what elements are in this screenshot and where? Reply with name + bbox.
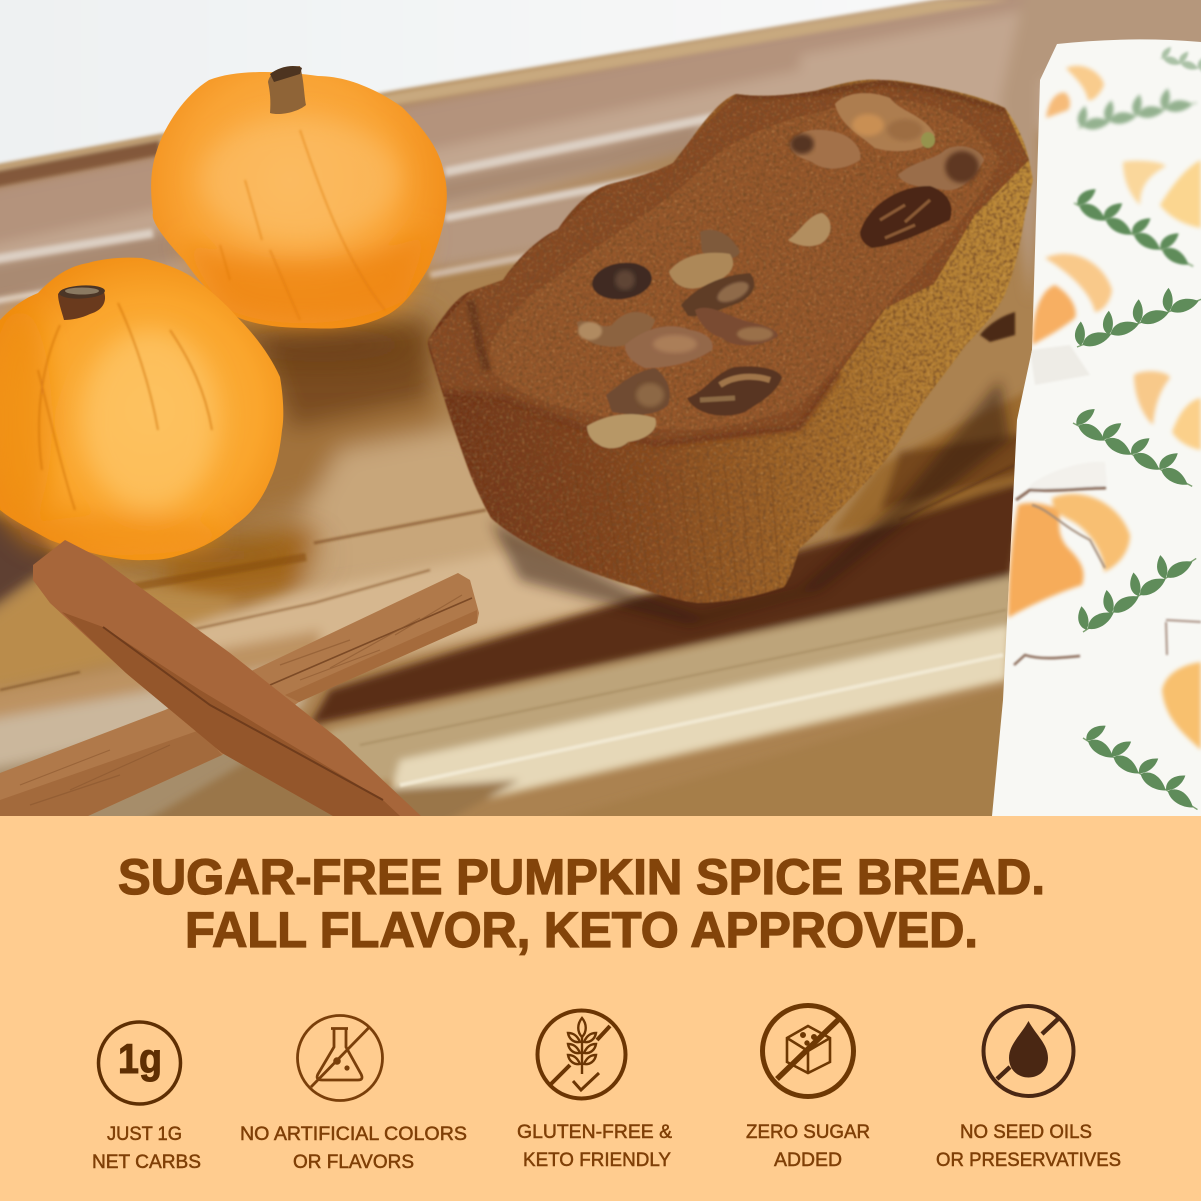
heading: SUGAR-FREE PUMPKIN SPICE BREAD. [118, 849, 1045, 905]
pumpkin shading [0, 310, 220, 555]
icon: 1g net carbs [98, 1022, 180, 1104]
loaf crust pleats [664, 466, 781, 600]
pumpkin shadows [100, 327, 430, 569]
icon: lower pumpkin [0, 258, 283, 560]
icon: upper pumpkin [151, 66, 447, 329]
caption: gluten-free and keto friendly [517, 1122, 672, 1171]
caption: just 1g net carbs: JUST 1G [107, 1124, 182, 1145]
caption: gluten-free and keto friendly: GLUTEN-FREE & [517, 1122, 672, 1143]
caption: just 1g net carbs [92, 1124, 201, 1173]
heading: FALL FLAVOR, KETO APPROVED. [185, 902, 978, 958]
heading [118, 849, 1045, 958]
board grain lines [0, 465, 1015, 785]
caption: zero sugar added: ZERO SUGAR [746, 1122, 870, 1143]
icon: cinnamon sticks [0, 540, 479, 816]
icon: 1g net carbs: 1g [118, 1035, 162, 1082]
caption: no artificial colors or flavors: OR FLAVORS [293, 1152, 414, 1173]
caption: no seed oils or preservatives: NO SEED OILS [960, 1122, 1092, 1143]
light streaks in back board [0, 116, 720, 302]
loaf top surface [428, 80, 1029, 446]
pumpkin shading [180, 118, 430, 323]
back blurry part of board [0, 0, 1201, 320]
panel: bottom information band [0, 816, 1201, 1201]
loaf crust [420, 70, 1040, 610]
kitchen towel with pumpkin pattern [985, 30, 1201, 816]
loaf rim shading [444, 82, 1005, 444]
caption: no seed oils or preservatives [936, 1122, 1121, 1171]
warm front part of board [0, 312, 560, 615]
caption: no artificial colors or flavors [240, 1124, 467, 1173]
towel ribbons and stems [1014, 345, 1201, 665]
icon: pumpkin bread loaf [420, 70, 1040, 610]
board back edge [0, 0, 1010, 192]
panel: product photo [0, 0, 1201, 850]
caption: zero sugar added [746, 1122, 870, 1171]
caption: no seed oils or preservatives: OR PRESERVATIVES [936, 1150, 1121, 1171]
icon: gluten-free wheat [538, 1010, 626, 1098]
upper pumpkin stem [268, 66, 306, 114]
loaf inner crumb [488, 100, 1000, 430]
crumbs behind loaf [980, 312, 1015, 342]
towel pumpkin motifs [1066, 66, 1104, 100]
white wall background [0, 0, 952, 166]
towel green sprigs [1066, 43, 1201, 815]
icon: no seed oils drop [984, 1006, 1074, 1096]
caption: no artificial colors or flavors: NO ARTIFICIAL COLORS [240, 1124, 467, 1145]
wooden cutting board [0, 0, 1201, 850]
caption: gluten-free and keto friendly: KETO FRIENDLY [523, 1150, 671, 1171]
shadow under loaf [490, 380, 1010, 625]
back stick [0, 573, 479, 816]
icon: zero sugar cube [762, 1006, 854, 1096]
icon: no artificial colors flask [298, 1016, 382, 1100]
walnut pieces [577, 93, 984, 448]
caption: zero sugar added: ADDED [774, 1150, 842, 1171]
caption: just 1g net carbs: NET CARBS [92, 1152, 201, 1173]
lower pumpkin stem [58, 292, 105, 320]
front stick [33, 540, 421, 816]
